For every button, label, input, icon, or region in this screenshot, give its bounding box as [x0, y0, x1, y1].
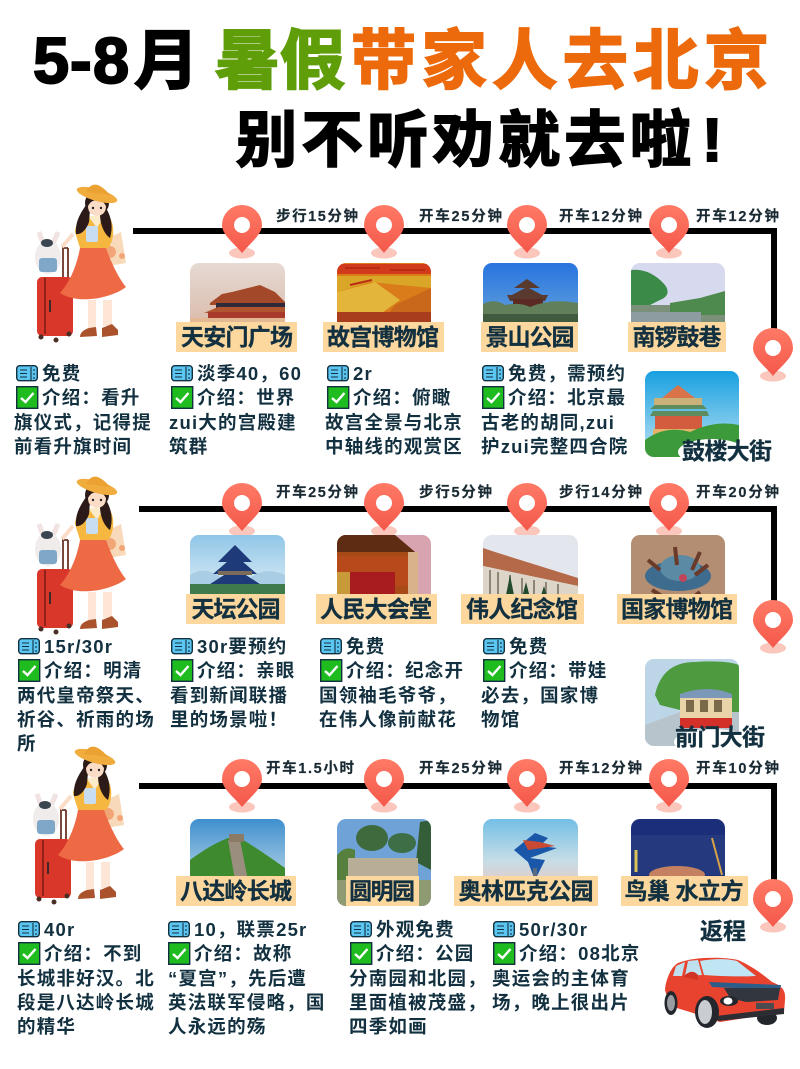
label: 奥林匹克公园: 奥林匹克公园: [458, 878, 594, 904]
info: 伟人纪念馆: 介绍：纪念开: [346, 660, 464, 681]
info: 故宫博物馆: zui大的宫殿建: [169, 412, 297, 433]
photo: Jingshan Park: [483, 263, 578, 322]
label: 南锣鼓巷: 南锣鼓巷: [632, 324, 722, 350]
info: 南锣鼓巷: 免费，需预约: [508, 363, 626, 384]
travel time labels: 步行5分钟: [419, 484, 492, 501]
label: 伟人纪念馆: 伟人纪念馆: [466, 596, 578, 622]
info: 天坛公园: 15r/30r: [44, 636, 113, 657]
info: 天安门广场: [14, 363, 152, 457]
info: 鸟巢: 50r/30r: [519, 919, 588, 940]
info: 天安门广场: 介绍：看升: [42, 387, 141, 408]
travel time labels: 开车20分钟: [696, 483, 779, 501]
info: 奥林匹克公园: 里面植被茂盛，: [349, 992, 487, 1013]
info: 伟人纪念馆: [319, 636, 464, 730]
info: 奥林匹克公园: 四季如画: [349, 1016, 428, 1037]
icon: red car: [664, 958, 785, 1028]
label: 前门大街: 前门大街: [675, 724, 765, 750]
route line 2: [139, 509, 774, 605]
info: 八达岭长城: 40r: [44, 919, 75, 940]
title line 2: 别不听劝就去啦: [236, 106, 691, 174]
info: 鸟巢: 介绍：08北京: [519, 943, 640, 964]
info: 故宫博物馆: 介绍：世界: [197, 387, 296, 408]
info: 国家博物馆: 介绍：带娃: [509, 660, 608, 681]
travel time labels: [276, 483, 779, 501]
info: 伟人纪念馆: 国领袖毛爷爷，: [319, 685, 457, 706]
info: 国家博物馆: 物馆: [481, 709, 520, 730]
photo: Nanluoguxiang: [631, 263, 725, 322]
info: 奥林匹克公园: 外观免费: [376, 919, 455, 940]
label: 天安门广场: 天安门广场: [181, 324, 293, 350]
info: 南锣鼓巷: 古老的胡同,zui: [481, 412, 615, 433]
title line 2: !: [702, 106, 722, 174]
photo: Tiananmen: [190, 263, 285, 322]
info: 景山公园: 故宫全景与北京: [325, 412, 463, 433]
info: 伟人纪念馆: 在伟人像前献花: [319, 709, 457, 730]
info: 人民大会堂: 介绍：亲眼: [197, 660, 296, 681]
photo: Temple of Heaven: [190, 535, 285, 594]
info: 圆明园: 10，联票25r: [194, 919, 307, 940]
map pins: [222, 483, 793, 654]
info: 奥林匹克公园: [349, 919, 487, 1037]
photo: National Museum: [631, 535, 725, 594]
info: 人民大会堂: 看到新闻联播: [170, 685, 288, 706]
label: 国家博物馆: 国家博物馆: [621, 596, 733, 622]
photo: Great Hall of the People: [337, 535, 431, 594]
travel time labels: 开车12分钟: [559, 759, 642, 777]
info: 圆明园: 介绍：故称: [194, 943, 293, 964]
info: 八达岭长城: 的精华: [17, 1016, 76, 1037]
info: 故宫博物馆: [169, 363, 302, 457]
travel time labels: [276, 207, 779, 225]
travel time labels: 开车25分钟: [419, 759, 502, 777]
photo: Great Wall: [190, 819, 285, 876]
info: 南锣鼓巷: 介绍：北京最: [508, 387, 626, 408]
info: 鸟巢: 场，晚上很出片: [492, 992, 630, 1013]
info: 故宫博物馆: 筑群: [169, 436, 208, 457]
title line 1: 5-8月: [33, 24, 199, 97]
label: 天坛公园: 天坛公园: [192, 596, 280, 622]
icon: traveller girl: [35, 183, 126, 342]
info: 奥林匹克公园: 介绍：公园: [376, 943, 475, 964]
info: 奥林匹克公园: 分南园和北园，: [349, 968, 487, 989]
travel time labels: 步行15分钟: [276, 208, 358, 225]
info: 圆明园: “夏宫”，先后遭: [168, 968, 307, 989]
info: 南锣鼓巷: 护zui完整四合院: [481, 436, 628, 457]
travel time labels: 开车25分钟: [419, 207, 502, 225]
title line 1: 带家人去北京: [351, 24, 769, 97]
info: 八达岭长城: [17, 919, 155, 1037]
icon: traveller girl: [35, 475, 126, 634]
info: 八达岭长城: 长城非好汉。北: [17, 968, 155, 989]
route line 3: [139, 786, 774, 885]
panel: route 1: [14, 183, 793, 465]
photo: Gulou Street: [645, 371, 739, 457]
info: 鸟巢: [492, 919, 640, 1013]
info: 伟人纪念馆: 免费: [346, 636, 385, 657]
info: 国家博物馆: 免费: [509, 636, 548, 657]
route line 1: [133, 231, 774, 332]
info: 圆明园: 人永远的殇: [168, 1016, 267, 1037]
info: 南锣鼓巷: [481, 363, 628, 457]
travel time labels: 步行14分钟: [559, 484, 642, 501]
photo: Olympic Park: [483, 819, 578, 876]
label: 返程: 返程: [700, 918, 746, 944]
label: 故宫博物馆: 故宫博物馆: [327, 324, 439, 350]
info: 人民大会堂: [170, 636, 296, 730]
info: 天安门广场: 旗仪式，记得提: [14, 412, 152, 433]
photo: Forbidden City: [337, 263, 431, 322]
icon: traveller girl: [33, 745, 124, 904]
travel time labels: [266, 759, 779, 777]
map pins: [222, 205, 793, 382]
info: 圆明园: [168, 919, 326, 1037]
info: 八达岭长城: 段是八达岭长城: [17, 992, 155, 1013]
info: 天安门广场: 免费: [42, 363, 81, 384]
travel time labels: 开车1.5小时: [266, 759, 354, 777]
info: 鸟巢: 奥运会的主体育: [492, 968, 630, 989]
info: 圆明园: 英法联军侵略，国: [168, 992, 326, 1013]
info: 天坛公园: 祈谷、祈雨的场: [17, 709, 155, 730]
info: 国家博物馆: [481, 636, 608, 730]
info: 国家博物馆: 必去，国家博: [481, 685, 599, 706]
label: 景山公园: 景山公园: [486, 324, 574, 350]
label: 鸟巢 水立方: 鸟巢 水立方: [624, 878, 744, 904]
info: 景山公园: [325, 363, 463, 457]
info: 故宫博物馆: 淡季40，60: [197, 363, 302, 384]
photo: Memorial Hall: [483, 535, 578, 594]
title: [33, 24, 769, 174]
travel time labels: 开车12分钟: [696, 207, 779, 225]
info: 景山公园: 中轴线的观赏区: [325, 436, 463, 457]
info: 景山公园: 2r: [353, 363, 373, 384]
title line 1: 暑假: [215, 24, 345, 97]
info: 天安门广场: 前看升旗时间: [14, 436, 132, 457]
info: 天坛公园: [17, 636, 155, 754]
info: 人民大会堂: 30r要预约: [197, 636, 287, 657]
title line 1: [33, 24, 769, 97]
label: 鼓楼大街: 鼓楼大街: [682, 438, 772, 464]
info: 天坛公园: 两代皇帝祭天、: [17, 685, 155, 706]
travel time labels: 开车12分钟: [559, 207, 642, 225]
photo: Qianmen Street: [645, 659, 739, 746]
photo: Bird's Nest: [631, 819, 725, 876]
info: 景山公园: 介绍：俯瞰: [353, 387, 452, 408]
label: 人民大会堂: 人民大会堂: [320, 596, 432, 622]
travel time labels: 开车10分钟: [696, 759, 779, 777]
info: 天坛公园: 介绍：明清: [44, 660, 143, 681]
photo: Yuanmingyuan: [337, 819, 431, 906]
info: 八达岭长城: 介绍：不到: [44, 943, 143, 964]
panel: route 3: [17, 745, 793, 1037]
label: 圆明园: 圆明园: [349, 878, 415, 904]
map pins: [222, 759, 793, 932]
info: 人民大会堂: 里的场景啦！: [170, 709, 288, 730]
label: 八达岭长城: 八达岭长城: [180, 878, 292, 904]
travel time labels: 开车25分钟: [276, 483, 358, 501]
info: 天坛公园: 所: [17, 733, 37, 754]
panel: route 2: [17, 475, 793, 755]
